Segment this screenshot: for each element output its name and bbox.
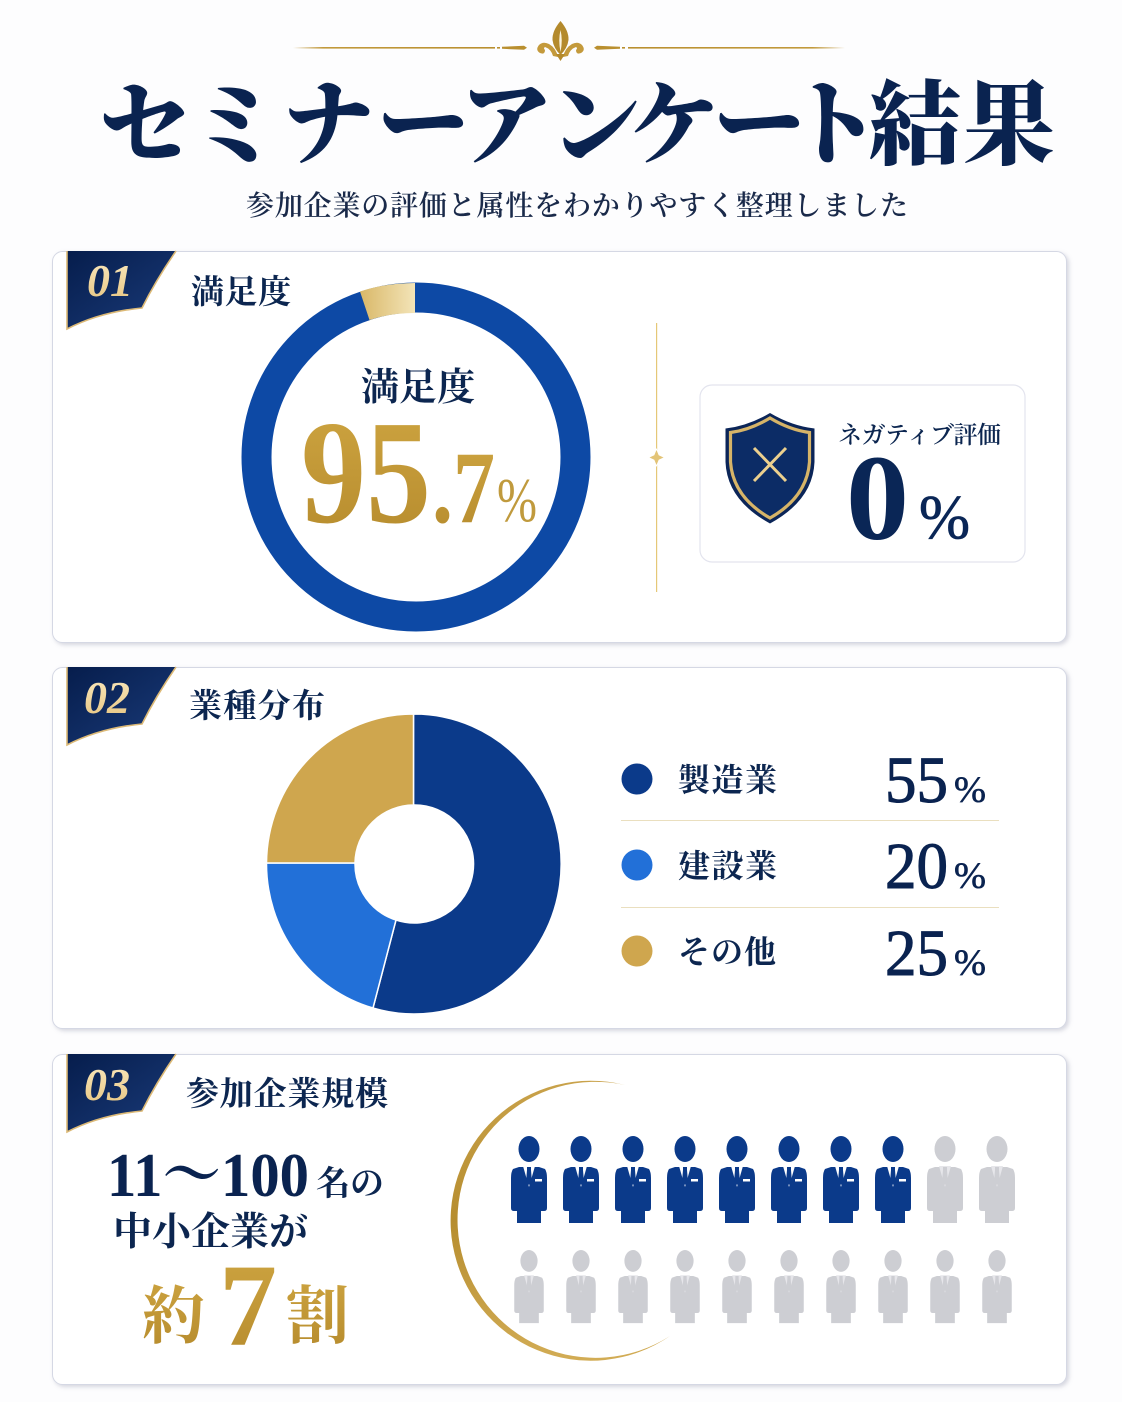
top ornament: fleur-de-lis divider [293, 21, 845, 61]
section badge 01 [67, 251, 176, 329]
section heading: 業種分布 [189, 680, 325, 727]
legend: construction: 建設業 [678, 841, 777, 887]
donut centre label: 満足度 [361, 356, 475, 411]
panel: 03 company size [52, 1054, 1066, 1384]
card background [52, 668, 1066, 1028]
satisfaction value: % [497, 467, 537, 535]
legend: construction: % [954, 856, 986, 897]
satisfaction value: 95 [301, 391, 431, 555]
negative rating label: ネガティブ評価 [838, 415, 1001, 450]
headline: 11-100 employees: 名の [316, 1156, 384, 1205]
section badge 02 [67, 667, 176, 745]
legend: manufacturing [622, 744, 986, 817]
negative rating box [700, 385, 1025, 562]
headline: about 70 percent: 7 [219, 1240, 277, 1371]
headline: about 70 percent: 約 [142, 1266, 205, 1357]
section badge 03 [67, 1054, 176, 1132]
section badge 02: 02 [84, 672, 130, 723]
card background [52, 1054, 1066, 1384]
pictogram: 8 of 10 highlighted [511, 1136, 1015, 1223]
section badge 01: 01 [87, 255, 133, 306]
legend: construction: 20 [885, 830, 948, 903]
donut chart: industries [266, 714, 561, 1014]
headline: about 70 percent: 割 [285, 1266, 349, 1357]
panel: 02 industry distribution [52, 667, 1066, 1028]
section heading: 満足度 [191, 266, 291, 313]
legend: other [622, 917, 986, 990]
card background [52, 252, 1066, 642]
panel: negative rating [700, 385, 1025, 566]
section heading: 参加企業規模 [186, 1068, 388, 1115]
gold crescent arc [451, 1081, 670, 1361]
satisfaction value: .7 [432, 431, 495, 545]
headline: 11-100 employees: 11〜100 [107, 1142, 309, 1210]
legend: manufacturing: % [954, 770, 986, 811]
legend: other: 25 [885, 917, 948, 990]
vertical divider with diamond [648, 323, 664, 592]
negative rating value: % [919, 484, 970, 552]
legend: manufacturing: 55 [885, 744, 948, 817]
headline: SMEs: 中小企業が [113, 1201, 308, 1257]
title: セミナーアンケート結果 [99, 52, 1055, 184]
headline: about 70 percent [142, 1240, 349, 1371]
negative rating value: 0 [846, 431, 909, 566]
satisfaction value [301, 391, 537, 555]
subtitle: 参加企業の評価と属性をわかりやすく整理しました [246, 184, 908, 224]
section badge 03: 03 [84, 1059, 130, 1110]
panel: 01 satisfaction [52, 251, 1066, 642]
legend: manufacturing: 製造業 [678, 755, 777, 801]
legend: other: % [954, 943, 986, 984]
legend: construction [622, 830, 986, 903]
pictogram: grey row [514, 1250, 1012, 1323]
legend: other: その他 [678, 927, 776, 973]
donut chart: satisfaction 95.7% [256, 283, 576, 616]
negative rating value [846, 431, 970, 566]
icon: shield with cross [726, 413, 814, 524]
